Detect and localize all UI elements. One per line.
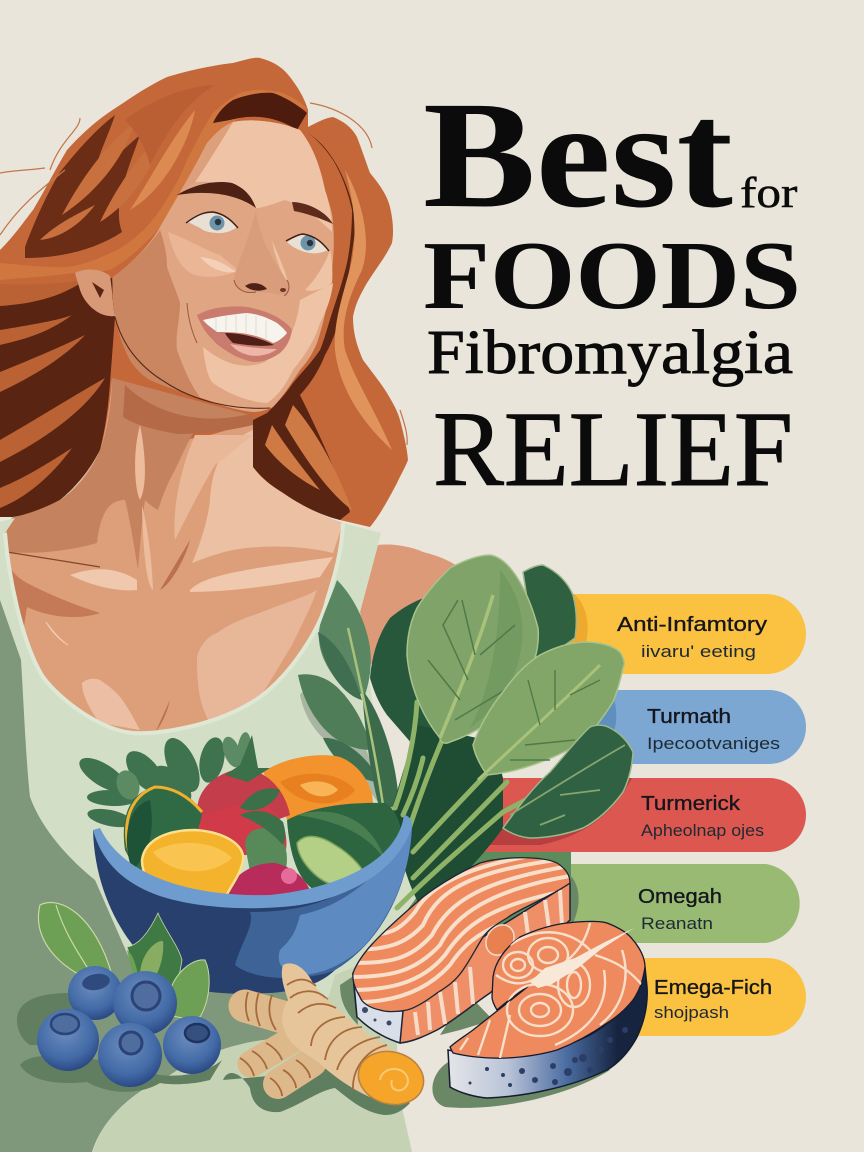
cut end [352, 1044, 430, 1112]
mouth [197, 306, 292, 362]
salmon skin [448, 967, 647, 1098]
woman [0, 58, 460, 1152]
right light leaf [473, 642, 624, 780]
pill: omegah: Reanatn [641, 914, 713, 933]
back dark leaves [370, 595, 440, 745]
bowl greens [74, 731, 253, 885]
blueberries [37, 966, 221, 1087]
lower dark leaf [503, 725, 633, 838]
central leaf [407, 555, 538, 743]
blueberry 5 [163, 1016, 221, 1074]
middle leaf [127, 913, 182, 1000]
pill: anti-inflammatory [560, 594, 806, 674]
pill: anti-inflammatory: iivaru' eeting [641, 642, 756, 661]
dark patch behind spinach [400, 852, 571, 960]
orange slice [263, 755, 373, 825]
turmeric root [223, 963, 430, 1115]
light ground [93, 950, 412, 1152]
big bowl spinach [287, 803, 402, 893]
pill: turmerick [470, 778, 806, 852]
salmon top [353, 858, 570, 1012]
hair back [0, 58, 408, 527]
stem shadow [393, 725, 503, 912]
spinach bunch [298, 555, 633, 912]
eyes [188, 213, 237, 233]
salmon spine [530, 928, 634, 988]
pill: emega-fich [620, 958, 806, 1036]
pill: turmath [590, 690, 806, 764]
root fingers [245, 1006, 312, 1084]
radish [223, 863, 314, 905]
root shadow [223, 1060, 410, 1115]
side swirl [480, 919, 520, 961]
salmon steak back [350, 850, 570, 1043]
blueberry 3 [37, 1009, 99, 1071]
title: RELIEF [433, 391, 793, 509]
pill: turmath: Turmath [647, 706, 731, 728]
pill: turmerick: Turmerick [641, 793, 741, 815]
tomato [197, 768, 290, 830]
stems [395, 682, 623, 908]
title: FOODS [423, 220, 801, 330]
pill: omegah: Omegah [638, 886, 722, 908]
pill: turmerick: Apheolnap ojes [641, 821, 764, 840]
yellow rind and spinach [124, 786, 202, 878]
pill: anti-inflammatory: Anti-Infamtory [617, 614, 767, 636]
brows [177, 182, 256, 208]
pill: turmath: Ipecootvaniges [647, 734, 780, 753]
title: for [740, 170, 797, 217]
root body [282, 963, 422, 1104]
root rings [240, 980, 387, 1096]
blueberry 2 [113, 971, 177, 1035]
salad bowl [74, 731, 412, 994]
salmon face [450, 922, 645, 1058]
salmon side [353, 883, 570, 1043]
nose [234, 210, 289, 294]
dark ground band [0, 600, 340, 1152]
herb sprig [298, 580, 400, 812]
face [75, 120, 334, 412]
citrus half [142, 830, 243, 905]
small spinach leaves [38, 903, 209, 1018]
neck and chest [5, 378, 343, 733]
benefit pills [470, 594, 806, 1036]
pill: omegah [560, 864, 800, 943]
ear [75, 270, 115, 316]
tank top [0, 518, 420, 1152]
salmon steak front [448, 922, 647, 1098]
title: Best [423, 69, 733, 239]
shoulder [360, 545, 460, 665]
blueberry 1 [68, 966, 122, 1020]
title [423, 69, 801, 509]
salmon side shadow [340, 975, 358, 1025]
right leaf [168, 960, 209, 1018]
berry shadows [17, 993, 222, 1092]
blueberry 4 [98, 1023, 162, 1087]
pill: emega-fich: Emega-Fich [654, 977, 772, 999]
left leaf [38, 903, 112, 983]
salmon shadows [432, 875, 610, 1108]
bowl body [93, 827, 412, 994]
pill: emega-fich: shojpash [654, 1003, 729, 1022]
title: Fibromyalgia [427, 319, 793, 387]
